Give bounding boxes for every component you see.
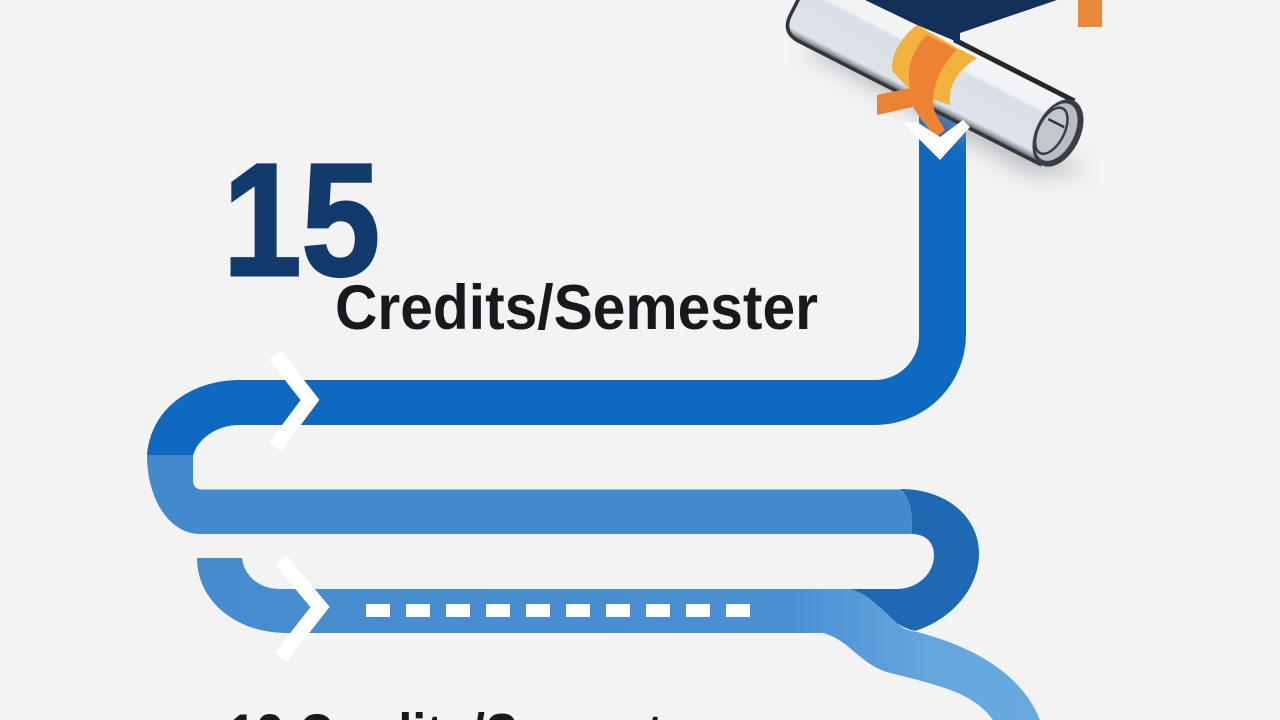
path segment: lower light blue run (197, 558, 1040, 720)
path segment: middle blue run (147, 455, 912, 534)
heading: 15: 15 (223, 130, 380, 309)
path segment: dark blue hairpin (848, 489, 979, 631)
winding path (147, 108, 1040, 720)
icon: graduation cap and diploma (781, 0, 1102, 175)
dashed centre line (366, 604, 750, 617)
diploma scroll (781, 0, 1094, 175)
diploma shadow (805, 35, 1085, 175)
cap tassel (1078, 0, 1102, 27)
arrow: lower chevron (281, 560, 320, 657)
ribbon: yellow band (892, 25, 977, 105)
arrow: upper chevron (275, 355, 310, 447)
text: credits per semester: Credits/Semester (335, 273, 818, 343)
graduation cap (865, 0, 1057, 43)
path segment: top dark blue run (147, 108, 966, 456)
ribbon: orange band and tails (877, 35, 957, 137)
arrow: top chevron (903, 120, 970, 160)
